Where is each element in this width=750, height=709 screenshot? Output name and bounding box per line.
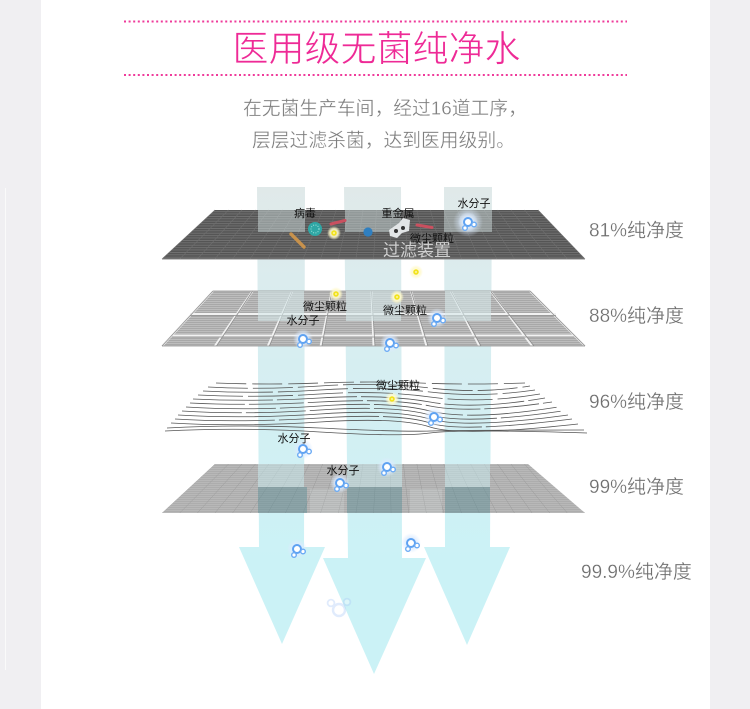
intro text: 在无菌生产车间，经过16道工序， xyxy=(243,98,527,118)
purity labels: 99.9%纯净度 xyxy=(581,561,692,583)
labels: 微尘颗粒 xyxy=(376,378,420,392)
title: 医用级无菌纯净水 xyxy=(232,28,521,69)
icon: bacteria rods xyxy=(291,220,432,247)
labels: 微尘颗粒 xyxy=(303,299,347,313)
arrow: right xyxy=(424,187,510,645)
flow arrows xyxy=(239,187,510,674)
purity labels xyxy=(581,220,692,583)
icon: virus xyxy=(308,222,322,236)
labels xyxy=(294,197,490,245)
labels xyxy=(278,378,420,445)
purity labels: 81%纯净度 xyxy=(589,220,684,242)
filter layer 2: framed mesh xyxy=(162,265,585,353)
purity labels: 96%纯净度 xyxy=(589,391,684,413)
labels: 重金属 xyxy=(382,206,414,220)
labels: 水分子 xyxy=(286,314,320,327)
top dotted rule xyxy=(124,20,627,22)
intro text: 层层过滤杀菌，达到医用级别。 xyxy=(252,130,515,150)
intro text xyxy=(243,98,527,150)
arrow: left xyxy=(239,187,325,644)
labels: 病毒 xyxy=(294,206,316,220)
filter layer 4: fine grey mesh xyxy=(162,457,585,513)
arrow: middle xyxy=(323,187,426,674)
labels: 水分子 xyxy=(278,432,310,445)
labels: 微尘颗粒 xyxy=(410,231,454,245)
label: 水分子 xyxy=(326,464,360,477)
icon: heavy metal xyxy=(389,218,410,238)
water molecules below filters xyxy=(287,533,421,616)
label: filter device: 过滤装置 xyxy=(383,241,451,260)
labels xyxy=(286,299,427,327)
labels: 微尘颗粒 xyxy=(383,303,427,317)
purity labels: 99%纯净度 xyxy=(589,476,684,498)
icon: faded large molecule xyxy=(328,599,350,616)
icon: blue particle xyxy=(363,227,373,237)
filter layer 1 contents xyxy=(291,197,490,260)
labels: 水分子 xyxy=(458,197,490,210)
filter layer 1: dark mesh xyxy=(162,210,585,259)
bottom dotted rule xyxy=(124,74,627,76)
purity labels: 88%纯净度 xyxy=(589,305,684,327)
filter layer 3: wavy membrane xyxy=(165,378,587,459)
